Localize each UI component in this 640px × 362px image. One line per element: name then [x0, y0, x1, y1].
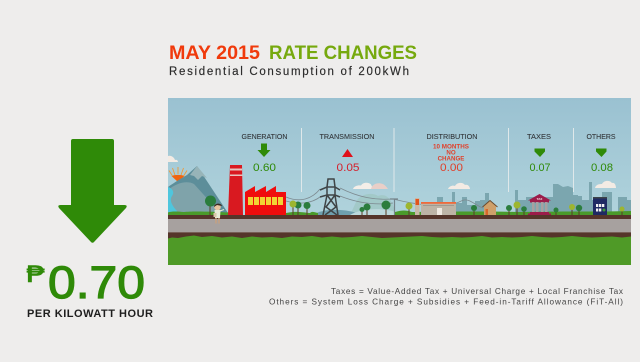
distribution column: DISTRIBUTION: [426, 132, 478, 141]
taxes column: TAXES: [527, 132, 551, 141]
icon: big down arrow: [58, 139, 127, 243]
total price: ₱: [26, 263, 46, 288]
power lines: [286, 188, 483, 208]
taxes column: [527, 134, 551, 171]
trees: [205, 196, 624, 215]
dividers: [302, 128, 574, 192]
taxes column: 0.07: [530, 162, 550, 174]
title: MAY 2015: [169, 42, 260, 64]
office building: [593, 197, 607, 215]
distribution column: NO: [446, 150, 456, 156]
title: RATE CHANGES: [269, 42, 417, 64]
generation column: GENERATION: [242, 132, 288, 141]
title: [169, 42, 417, 64]
gas station: [415, 198, 456, 215]
clouds: [168, 156, 616, 189]
person: [214, 204, 224, 224]
subtitle: Residential Consumption of 200kWh: [169, 66, 409, 78]
mountains: [168, 166, 228, 215]
generation column: [242, 134, 287, 171]
city skyline: [437, 182, 631, 215]
power pole: [390, 199, 398, 215]
road: [168, 215, 631, 239]
house: [482, 200, 498, 215]
background hills: [313, 194, 396, 215]
bank tax building: TAX: [537, 197, 542, 201]
footnotes: [269, 287, 623, 306]
generation column: 0.60: [253, 162, 276, 174]
icon: factory with chimney: [228, 165, 286, 215]
others column: 0.08: [591, 162, 613, 174]
distribution column: 0.00: [440, 162, 463, 174]
distribution column: CHANGE: [438, 156, 464, 162]
bank tax building: [528, 194, 551, 215]
transmission column: TRANSMISSION: [320, 132, 374, 141]
others column: [586, 134, 616, 171]
others column: OTHERS: [586, 132, 616, 141]
transmission column: 0.05: [336, 162, 360, 174]
distribution column: 10 MONTHS: [433, 144, 469, 150]
footnotes: Others = System Loss Charge + Subsidies + Feed-in-Tariff Allowance (FiT-All): [269, 298, 623, 306]
icon: sun: [169, 167, 187, 182]
icon: transmission tower: [320, 179, 340, 215]
panel: illustrated rate breakdown: [168, 98, 631, 265]
distribution column: [427, 134, 477, 171]
grass field: [168, 236, 631, 265]
total price: 0.70: [48, 257, 145, 308]
unit label: PER KILOWATT HOUR: [27, 308, 153, 320]
grass strip: [168, 210, 631, 215]
transmission column: [320, 134, 374, 171]
footnotes: Taxes = Value-Added Tax + Universal Charge + Local Franchise Tax: [331, 287, 623, 296]
